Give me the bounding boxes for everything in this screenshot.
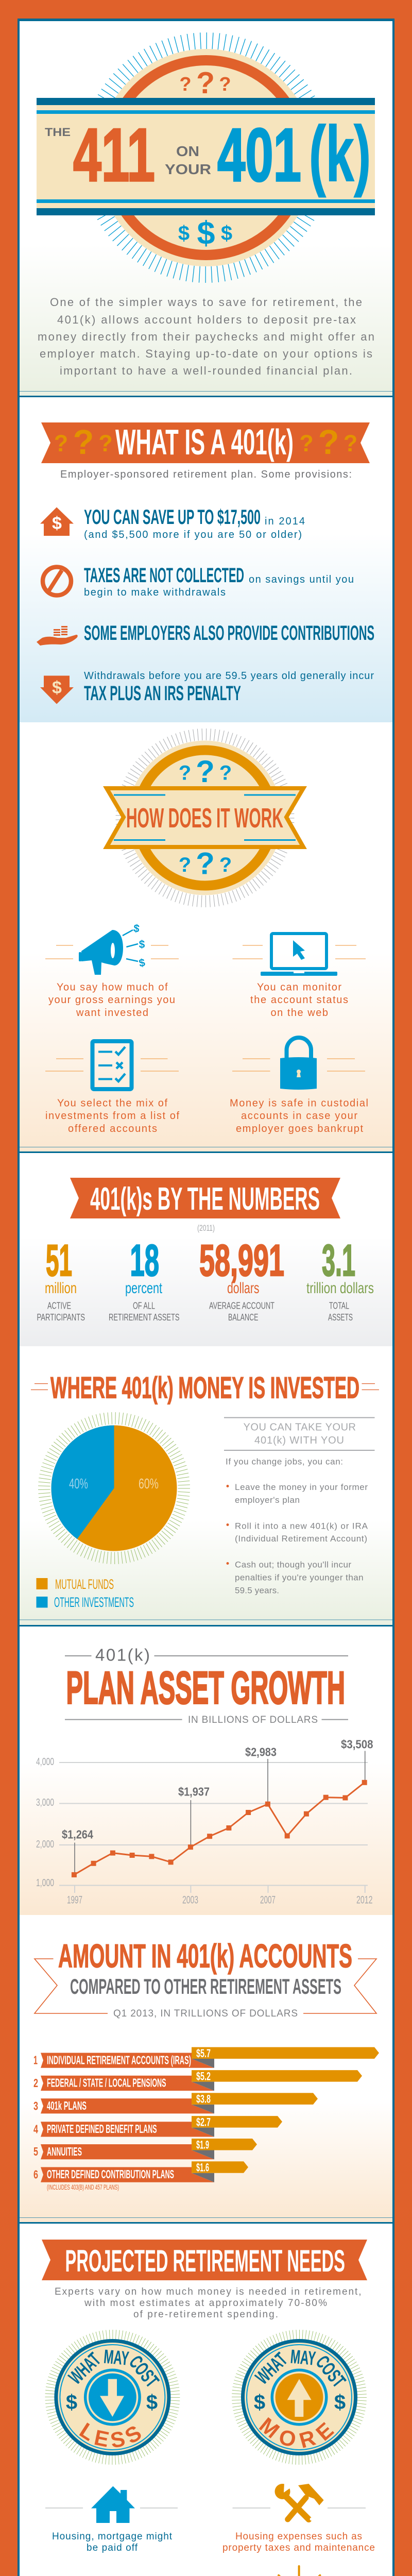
line chart: 4,000 <box>36 1756 54 1768</box>
bar: other defined contribution: $1.6 <box>196 2161 209 2174</box>
panel: amount in 401(k) accounts <box>20 1937 392 2224</box>
pie chart <box>44 1418 184 1558</box>
stat: total assets <box>306 1236 374 1323</box>
provision: save limit: (and $5,500 more if you are 50 or older) <box>84 529 302 540</box>
provision: penalty <box>84 670 374 705</box>
ribbon heading: ? <box>98 430 113 456</box>
bar: private defined benefit: PRIVATE DEFINED BENEFIT PLANS <box>47 2122 157 2136</box>
stat: balance: BALANCE <box>228 1312 259 1323</box>
intro paragraph: One of the simpler ways to save for retirement, the <box>50 296 362 309</box>
heading: IN BILLIONS OF DOLLARS <box>188 1715 318 1725</box>
hero dollar signs <box>178 215 232 251</box>
text: monitor: on the web <box>271 1007 328 1019</box>
hero dollar signs: $ <box>221 222 232 245</box>
heading <box>35 1937 376 2019</box>
badge: what may cost more: $ <box>334 2391 346 2414</box>
bar: 401k plans: $3.8 <box>196 2093 211 2106</box>
icon: megaphone <box>79 922 146 975</box>
line chart: 2003 <box>182 1894 198 1906</box>
text: housing less <box>52 2531 173 2553</box>
bar: 401k plans: 3 <box>33 2099 38 2112</box>
intro paragraph: 401(k) allows account holders to deposit pre-tax <box>57 313 356 326</box>
hero sunburst emblem <box>89 41 323 275</box>
ribbon heading <box>70 1178 340 1218</box>
text: housing more: Housing expenses such as <box>235 2531 362 2542</box>
badge: what may cost more: COST <box>311 2352 350 2392</box>
badge: what may cost less <box>45 2330 180 2465</box>
icon: penalty arrow down: $ <box>52 678 62 698</box>
icon: no taxes <box>43 567 71 596</box>
panel: where money is invested <box>20 1371 392 1626</box>
bar: IRAs: $5.7 <box>196 2047 211 2060</box>
text: select investments <box>45 1097 179 1134</box>
intro text: of pre-retirement spending. <box>133 2309 278 2320</box>
callout: take it with you: Cash out; though you'll incur <box>235 1560 351 1569</box>
badge: what may cost more: MAY <box>289 2346 317 2370</box>
badge question marks <box>179 754 232 881</box>
hero dollar signs: $ <box>197 215 215 251</box>
bar: private defined benefit: $2.7 <box>196 2115 211 2128</box>
line chart: $3,508 <box>341 1737 373 1751</box>
badge: what may cost more: WHAT <box>252 2349 292 2388</box>
legend: OTHER INVESTMENTS <box>54 1595 134 1610</box>
badge question marks: ? <box>219 854 232 876</box>
text: money is safe: Money is safe in custodial <box>230 1097 368 1109</box>
line chart: $1,264 <box>62 1828 93 1841</box>
text: housing less: be paid off <box>87 2543 138 2553</box>
bar: pensions: $5.2 <box>196 2070 211 2082</box>
text: monitor: You can monitor <box>257 982 341 993</box>
heading: Q1 2013, IN TRILLIONS OF DOLLARS <box>113 2008 298 2019</box>
stat: participants: million <box>45 1280 77 1297</box>
badge question marks: ? <box>196 846 215 881</box>
line chart: 2,000 <box>36 1839 54 1850</box>
bar: other defined contribution: OTHER DEFINED CONTRIBUTION PLANS <box>47 2167 174 2181</box>
badge ribbon: HOW DOES IT WORK <box>126 803 283 834</box>
panel: what is a 401(k) <box>20 422 392 722</box>
decorative: megaphone rules <box>45 945 179 959</box>
text: select investments: offered accounts <box>68 1123 157 1134</box>
decorative: laptop rules <box>233 945 366 959</box>
callout: take it with you: Roll it into a new 401(k) or IRA <box>235 1521 368 1531</box>
hero dollar signs: $ <box>178 222 190 245</box>
hero title: 401 <box>217 113 301 197</box>
hero title: YOUR <box>165 161 211 177</box>
hero question marks: ? <box>196 66 215 100</box>
bar: private defined benefit: 4 <box>33 2122 38 2136</box>
icon: laptop with cursor <box>261 934 337 976</box>
icon: save arrow up: $ <box>52 514 62 533</box>
decorative: house rules <box>45 2507 178 2509</box>
hero question marks: ? <box>219 74 231 95</box>
pie chart: 40% <box>69 1476 88 1492</box>
callout: take it with you: penalties if you're younger than <box>235 1572 364 1583</box>
stat: balance: dollars <box>227 1280 260 1297</box>
stat: total assets: ASSETS <box>328 1312 353 1323</box>
stat: balance: AVERAGE ACCOUNT <box>209 1300 274 1311</box>
hero question marks <box>179 66 231 100</box>
bar: pensions: 2 <box>33 2076 38 2090</box>
bar: 401k plans: 401k PLANS <box>47 2099 87 2112</box>
bar: annuities: 5 <box>33 2145 38 2158</box>
icon: light bulb <box>273 2566 326 2576</box>
hero title band <box>37 98 375 215</box>
icon: house <box>91 2486 135 2523</box>
text: say how much: You say how much of <box>57 982 168 993</box>
stat: percent <box>109 1236 179 1323</box>
callout: take it with you <box>224 1417 375 1595</box>
text: monitor: the account status <box>250 994 348 1006</box>
provision: taxes <box>84 564 354 598</box>
decorative: checklist rules <box>45 1059 179 1071</box>
line chart: 1997 <box>67 1894 82 1906</box>
intro text <box>55 2286 362 2320</box>
stat: total assets: trillion dollars <box>306 1280 374 1297</box>
bar: other defined contribution: (INCLUDES 403(B) AND 457 PLANS) <box>47 2183 119 2191</box>
line chart: $1,937 <box>178 1785 210 1798</box>
bar: other defined contribution: 6 <box>33 2168 38 2181</box>
badge question marks: ? <box>179 761 191 784</box>
callout: take it with you: YOU CAN TAKE YOUR <box>243 1422 356 1433</box>
callout: take it with you: 59.5 years. <box>235 1586 279 1595</box>
panel: by the numbers <box>20 1178 392 1346</box>
stat: participants: ACTIVE <box>47 1300 71 1311</box>
provision: save limit: YOU CAN SAVE UP TO $17,500 <box>84 506 261 529</box>
stat: participants: 51 <box>46 1236 72 1285</box>
stat: percent: percent <box>125 1280 162 1297</box>
icon: megaphone: $ <box>132 922 140 935</box>
panel: projected retirement needs <box>42 2240 375 2576</box>
callout: take it with you: If you change jobs, you can: <box>226 1457 343 1466</box>
intro text: with most estimates at approximately 70-80% <box>84 2298 327 2309</box>
badge question marks: ? <box>179 854 191 876</box>
line chart: 1,000 <box>36 1877 54 1889</box>
pie chart: 60% <box>139 1476 159 1492</box>
badge: what may cost less: MAY <box>103 2346 130 2370</box>
intro paragraph <box>38 296 374 377</box>
ribbon heading: ? <box>54 430 68 456</box>
line chart <box>36 1737 373 1906</box>
icon: megaphone: $ <box>139 939 145 951</box>
intro paragraph: employer match. Staying up-to-date on your options is <box>40 347 372 360</box>
bar: pensions: FEDERAL / STATE / LOCAL PENSIONS <box>47 2076 166 2090</box>
text: say how much: your gross earnings you <box>48 994 175 1006</box>
provision: save limit: in 2014 <box>265 516 305 527</box>
text: say how much: want invested <box>76 1007 148 1019</box>
heading <box>65 1646 348 1725</box>
text: housing more <box>222 2531 375 2553</box>
provision: taxes: TAXES ARE NOT COLLECTED <box>84 564 244 587</box>
hero title: (k) <box>309 110 371 198</box>
provision: taxes: begin to make withdrawals <box>84 587 226 598</box>
callout: take it with you: employer's plan <box>235 1495 300 1505</box>
provision: save limit <box>84 506 305 540</box>
ribbon heading <box>41 422 370 463</box>
line chart: 3,000 <box>36 1797 54 1808</box>
badge: what may cost more: $ <box>254 2391 265 2414</box>
ribbon heading: ? <box>73 423 94 462</box>
hero title: ON <box>176 143 199 159</box>
icon: hand with coins <box>37 626 78 646</box>
hero title: 411 <box>73 113 155 197</box>
line chart: 2012 <box>356 1894 373 1906</box>
icon: megaphone: $ <box>138 957 146 970</box>
bar: pensions <box>33 2070 362 2091</box>
stat: balance: 58,991 <box>199 1236 284 1285</box>
decorative: tools rules <box>233 2507 366 2509</box>
bar: annuities: ANNUITIES <box>47 2145 82 2158</box>
stat: participants: PARTICIPANTS <box>37 1312 85 1323</box>
provision: penalty: TAX PLUS AN IRS PENALTY <box>84 682 241 705</box>
panel: how does it work <box>20 735 392 1153</box>
text: money is safe <box>230 1097 368 1134</box>
bar: IRAs: 1 <box>33 2054 38 2067</box>
provision: penalty: Withdrawals before you are 59.5 years old generally incur <box>84 670 374 682</box>
legend: MUTUAL FUNDS <box>55 1577 114 1592</box>
icon: save arrow up <box>40 507 74 536</box>
stat: balance <box>199 1236 284 1323</box>
callout: take it with you: Leave the money in your former <box>235 1482 368 1492</box>
bar: private defined benefit <box>33 2115 282 2137</box>
hero title <box>45 110 371 198</box>
ribbon heading: ? <box>344 430 357 456</box>
intro text: Experts vary on how much money is needed in retirement, <box>55 2286 362 2297</box>
bar: annuities: $1.9 <box>196 2138 209 2151</box>
bar: annuities <box>33 2138 257 2159</box>
line chart: 2007 <box>260 1894 276 1906</box>
badge ribbon <box>107 788 303 847</box>
bar: other defined contribution <box>33 2161 248 2191</box>
subtitle: Employer-sponsored retirement plan. Some provisions: <box>60 469 352 480</box>
bar: IRAs: INDIVIDUAL RETIREMENT ACCOUNTS (IRAS) <box>47 2053 191 2066</box>
stat: total assets: TOTAL <box>329 1300 349 1311</box>
intro paragraph: important to have a well-rounded financial plan. <box>60 364 352 377</box>
hero question marks: ? <box>179 74 192 95</box>
ribbon heading: WHAT IS A 401(k) <box>115 422 294 462</box>
decorative: padlock rules <box>232 1059 365 1071</box>
year note: (2011) <box>197 1223 215 1233</box>
provision: taxes: on savings until you <box>249 574 354 585</box>
badge: what may cost less: COST <box>125 2352 163 2392</box>
intro paragraph: money directly from their paychecks and might offer an <box>38 330 374 343</box>
icon: checklist <box>93 1041 132 1089</box>
line chart: $2,983 <box>245 1745 277 1758</box>
badge emblem <box>122 735 288 902</box>
text: housing less: Housing, mortgage might <box>52 2531 173 2542</box>
bar: IRAs <box>33 2047 379 2068</box>
badge question marks: ? <box>196 754 215 789</box>
callout: take it with you: 401(k) WITH YOU <box>254 1435 344 1446</box>
ribbon heading: ? <box>318 423 339 462</box>
stat: percent: OF ALL <box>133 1300 155 1311</box>
badge: what may cost less: $ <box>66 2391 77 2414</box>
text: money is safe: accounts in case your <box>241 1110 357 1122</box>
ribbon heading: ? <box>299 430 314 456</box>
text: select investments: You select the mix of <box>57 1097 167 1109</box>
text: select investments: investments from a list of <box>45 1110 179 1122</box>
callout: take it with you: (Individual Retirement Account) <box>235 1534 367 1544</box>
badge: what may cost more: MORE <box>259 2417 335 2448</box>
icon: hammer and wrench <box>275 2482 324 2521</box>
stat: total assets: 3.1 <box>322 1236 355 1285</box>
text: monitor <box>250 982 348 1019</box>
bar: 401k plans <box>33 2093 318 2113</box>
stat: percent: 18 <box>130 1236 159 1285</box>
badge question marks: ? <box>219 761 232 784</box>
text: money is safe: employer goes bankrupt <box>236 1123 363 1134</box>
panel: hero <box>20 41 392 397</box>
text: housing more: property taxes and maintenance <box>222 2543 375 2553</box>
badge: what may cost less: LESS <box>79 2422 141 2447</box>
legend <box>36 1577 134 1610</box>
icon: padlock <box>280 1038 317 1090</box>
heading: 401(k) <box>95 1646 150 1664</box>
badge: what may cost less: WHAT <box>65 2349 105 2388</box>
icon: penalty arrow down <box>40 676 74 704</box>
badge: what may cost more <box>232 2330 367 2465</box>
badge: what may cost less: $ <box>146 2391 158 2414</box>
stat: participants <box>37 1236 85 1323</box>
stat: percent: RETIREMENT ASSETS <box>109 1312 179 1323</box>
panel: plan asset growth <box>20 1646 392 1915</box>
text: say how much <box>48 982 175 1019</box>
hero title: THE <box>45 126 71 139</box>
